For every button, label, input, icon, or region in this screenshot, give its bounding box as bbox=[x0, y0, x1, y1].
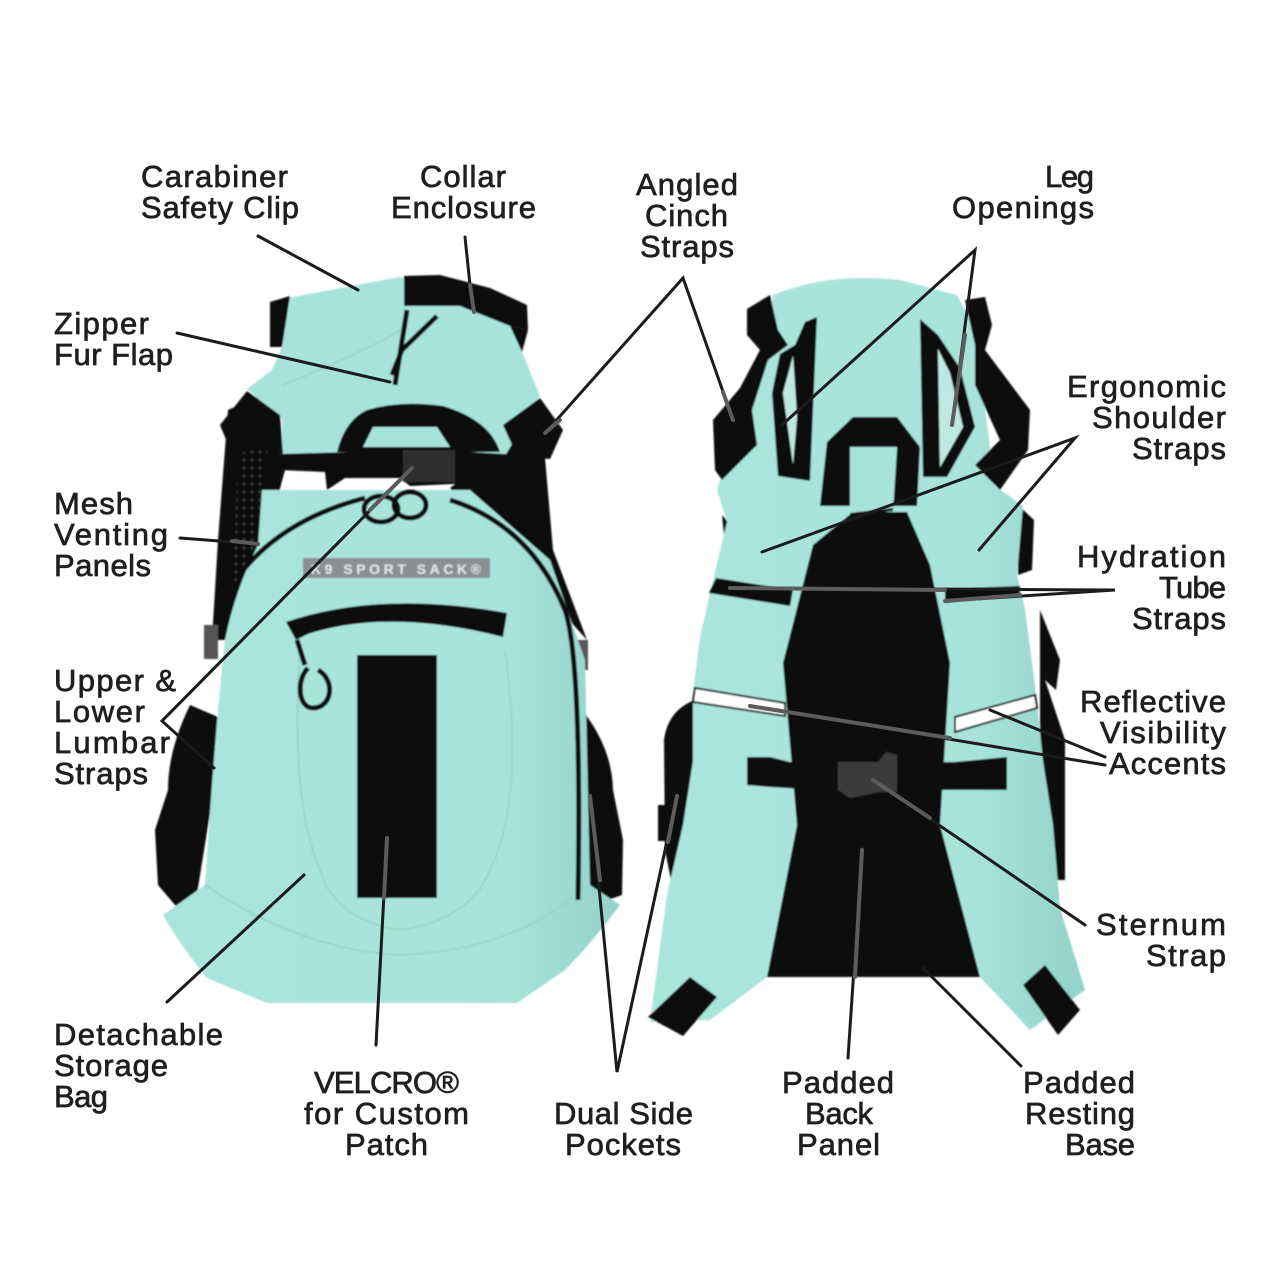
label: Padded Resting Base: Padded bbox=[1023, 1065, 1135, 1100]
label: Hydration Tube Straps: Straps bbox=[1132, 601, 1226, 636]
left mesh venting panel bbox=[212, 395, 285, 640]
label: VELCRO for Custom Patch: for Custom bbox=[304, 1096, 469, 1131]
back left top straps bbox=[713, 295, 788, 480]
line: collar bbox=[465, 237, 474, 312]
label: Collar Enclosure: Enclosure bbox=[391, 190, 536, 225]
hydration tube band right bbox=[945, 586, 1020, 603]
label: Sternum Strap: Strap bbox=[1146, 938, 1226, 973]
line: reflective bbox=[750, 706, 1105, 765]
line: sternum bbox=[873, 780, 1085, 925]
label: Padded Resting Base: Base bbox=[1065, 1127, 1135, 1162]
sternum strap bbox=[747, 757, 1007, 790]
label: Angled Cinch Straps: Straps bbox=[640, 229, 734, 264]
label: Zipper Fur Flap bbox=[54, 306, 173, 372]
label: Detachable Storage Bag: Detachable bbox=[54, 1017, 223, 1052]
label: Upper & Lower Lumbar Straps: Straps bbox=[54, 756, 148, 791]
label: Dual Side Pockets: Pockets bbox=[565, 1127, 681, 1162]
label: Leg Openings: Leg bbox=[1045, 159, 1094, 194]
velcro patch bbox=[357, 655, 437, 898]
back left side pocket bbox=[664, 700, 695, 885]
sternum buckle bbox=[838, 752, 897, 798]
label: VELCRO for Custom Patch: VELCRO® bbox=[314, 1065, 459, 1100]
line: angled cinch bbox=[545, 278, 733, 433]
right shoulder wing bbox=[503, 398, 563, 459]
label: Hydration Tube Straps bbox=[1077, 539, 1226, 636]
label: Hydration Tube Straps: Hydration bbox=[1077, 539, 1226, 574]
line: lumbar bbox=[162, 468, 412, 768]
label: Padded Back Panel: Padded bbox=[782, 1065, 894, 1100]
label: Upper & Lower Lumbar Straps: Lower bbox=[54, 694, 145, 729]
label: Padded Back Panel: Panel bbox=[797, 1127, 880, 1162]
label: Leg Openings bbox=[952, 159, 1094, 225]
line: resting base bbox=[923, 968, 1021, 1066]
label: Upper & Lower Lumbar Straps: Lumbar bbox=[54, 725, 170, 760]
label: Carabiner Safety Clip bbox=[141, 159, 299, 225]
carry handle bbox=[337, 404, 500, 452]
main body bbox=[163, 490, 620, 1003]
line: dual side pockets bbox=[590, 795, 677, 1072]
label: Carabiner Safety Clip: Safety Clip bbox=[141, 190, 299, 225]
label: Angled Cinch Straps: Angled bbox=[636, 167, 738, 202]
padded back panel bbox=[767, 512, 980, 977]
label: VELCRO for Custom Patch: Patch bbox=[345, 1127, 428, 1162]
line: velcro bbox=[376, 837, 387, 1045]
label: Detachable Storage Bag bbox=[54, 1017, 223, 1114]
label: Angled Cinch Straps bbox=[636, 167, 738, 264]
label: Padded Back Panel: Back bbox=[805, 1096, 874, 1131]
label: Mesh Venting Panels: Panels bbox=[54, 548, 151, 583]
label: Reflective Visibility Accents bbox=[1080, 684, 1226, 781]
line: ergonomic bbox=[762, 438, 1075, 552]
leader lines bbox=[162, 236, 1115, 1072]
label: Reflective Visibility Accents: Reflective bbox=[1080, 684, 1226, 719]
label: Upper & Lower Lumbar Straps bbox=[54, 663, 176, 791]
label: Sternum Strap bbox=[1096, 907, 1226, 973]
line: mesh bbox=[180, 538, 258, 544]
reflective stripes left bbox=[693, 688, 785, 716]
left shoulder strap end bbox=[648, 977, 717, 1036]
upper lumbar strap bbox=[280, 452, 540, 496]
back view of backpack bbox=[648, 278, 1085, 1036]
hydration tube band left bbox=[709, 578, 793, 606]
hood bbox=[247, 277, 540, 456]
label: Collar Enclosure: Collar bbox=[420, 159, 506, 194]
back silhouette bbox=[650, 278, 1085, 1030]
label: Padded Resting Base bbox=[1023, 1065, 1135, 1162]
line: leg openings bbox=[782, 250, 975, 425]
right leg opening bbox=[920, 319, 975, 477]
label: Dual Side Pockets bbox=[554, 1096, 693, 1162]
line: padded back bbox=[848, 848, 862, 1058]
upper left wedge bbox=[722, 515, 735, 555]
label: Ergonomic Shoulder Straps: Straps bbox=[1132, 431, 1226, 466]
label: Hydration Tube Straps: Tube bbox=[1159, 570, 1226, 605]
line: zipper fur flap bbox=[177, 333, 390, 382]
logo label: K9 SPORT SACK® bbox=[311, 561, 482, 577]
safety clip line bbox=[392, 310, 437, 385]
label: Mesh Venting Panels: Venting bbox=[54, 517, 168, 552]
line: storage bag bbox=[167, 875, 304, 1002]
left side pocket bbox=[155, 705, 225, 925]
upper right wedge bbox=[1018, 505, 1034, 575]
label: Reflective Visibility Accents: Accents bbox=[1109, 746, 1226, 781]
label: Carabiner Safety Clip: Carabiner bbox=[141, 159, 288, 194]
right shoulder strap end bbox=[1023, 965, 1080, 1035]
right hood trim bbox=[510, 326, 528, 352]
left shoulder wing bbox=[220, 391, 283, 454]
right black side panel bbox=[450, 400, 587, 640]
label: VELCRO for Custom Patch bbox=[304, 1065, 469, 1162]
line: hydration bbox=[730, 588, 1115, 601]
label: Leg Openings: Openings bbox=[952, 190, 1094, 225]
mesh dots bbox=[234, 425, 272, 585]
label: Sternum Strap: Sternum bbox=[1096, 907, 1226, 942]
line: carabiner bbox=[258, 236, 358, 290]
collar enclosure band bbox=[404, 275, 528, 330]
label: Zipper Fur Flap: Fur Flap bbox=[54, 337, 173, 372]
label: Upper & Lower Lumbar Straps: Upper & bbox=[54, 663, 176, 698]
left leg opening bbox=[772, 317, 817, 481]
label: Dual Side Pockets: Dual Side bbox=[554, 1096, 693, 1131]
label: Detachable Storage Bag: Storage bbox=[54, 1048, 168, 1083]
left hood trim bbox=[270, 296, 290, 347]
logo rings bbox=[364, 492, 426, 522]
label: Ergonomic Shoulder Straps: Shoulder bbox=[1092, 400, 1226, 435]
label: Angled Cinch Straps: Cinch bbox=[645, 198, 728, 233]
label: Ergonomic Shoulder Straps bbox=[1067, 369, 1226, 466]
label: Reflective Visibility Accents: Visibility bbox=[1100, 715, 1226, 750]
back right top straps bbox=[965, 297, 1030, 490]
reflective stripes right bbox=[955, 695, 1037, 732]
side release buckle bbox=[403, 450, 455, 482]
front view of backpack bbox=[155, 275, 623, 1003]
storage bag seams bbox=[205, 330, 585, 955]
zipper pull bbox=[297, 640, 330, 708]
top carry handle bbox=[820, 417, 920, 516]
main dome zipper bbox=[237, 498, 579, 900]
label: Zipper Fur Flap: Zipper bbox=[54, 306, 149, 341]
label: Collar Enclosure bbox=[391, 159, 536, 225]
right side pocket bbox=[578, 705, 623, 910]
label: Mesh Venting Panels: Mesh bbox=[54, 486, 133, 521]
label: Ergonomic Shoulder Straps: Ergonomic bbox=[1067, 369, 1226, 404]
label: Padded Back Panel bbox=[782, 1065, 894, 1162]
gray line ends over black areas bbox=[232, 285, 1020, 977]
side buckles bbox=[204, 625, 588, 670]
label: Padded Resting Base: Resting bbox=[1025, 1096, 1135, 1131]
front pocket zipper bbox=[286, 603, 507, 640]
label: Mesh Venting Panels bbox=[54, 486, 168, 583]
leg opening mesh bbox=[783, 349, 963, 467]
label: Detachable Storage Bag: Bag bbox=[54, 1079, 108, 1114]
back right side pocket bbox=[1040, 610, 1065, 880]
